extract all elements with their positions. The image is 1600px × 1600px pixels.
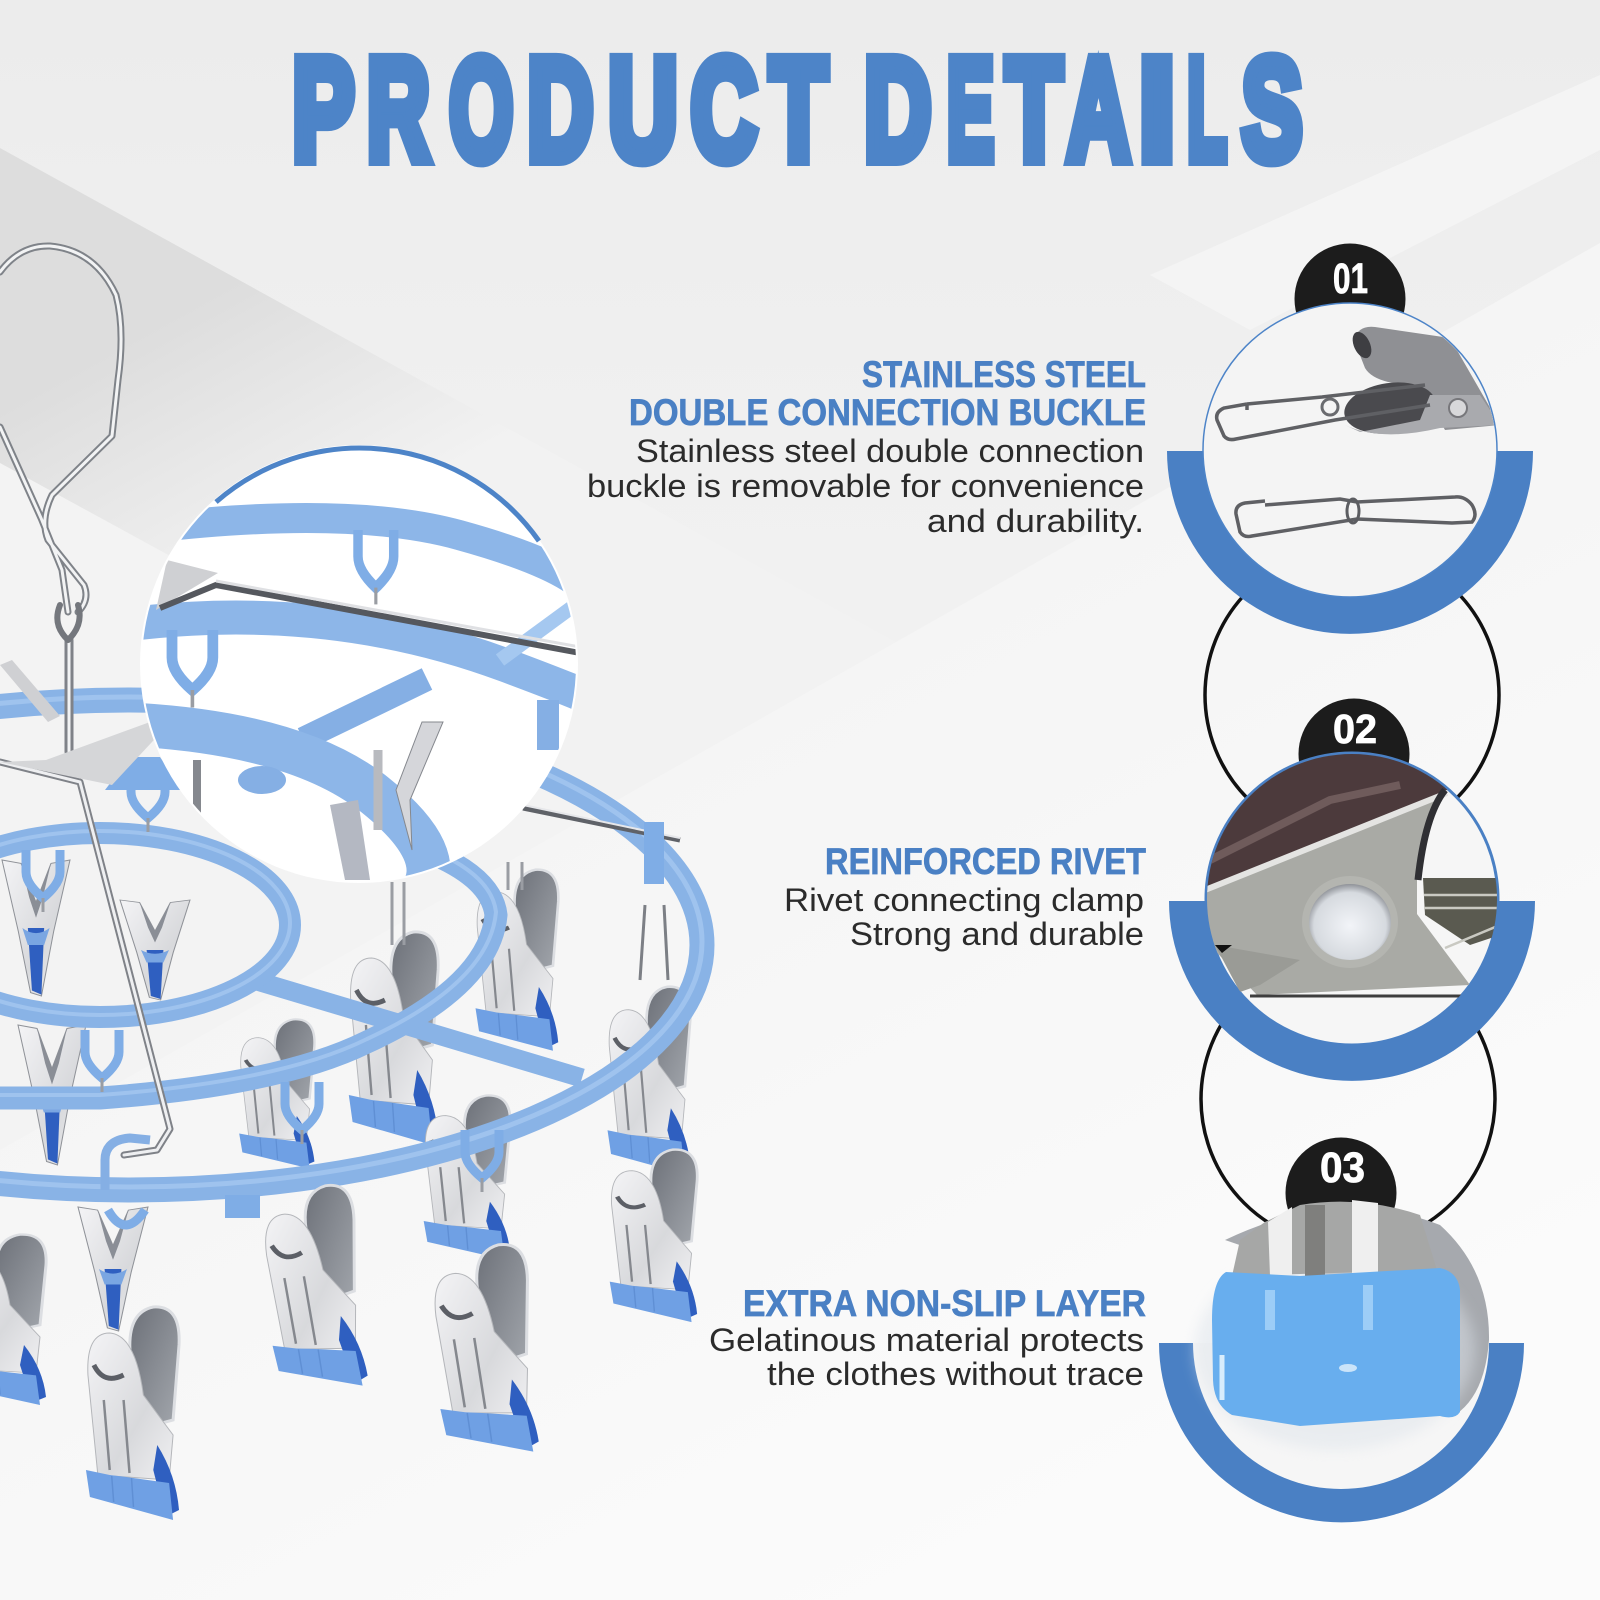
title: A [1067,29,1130,190]
photo: rivet close-up [1200,750,1500,1045]
badge 02 [1298,698,1410,810]
magnifier lens [140,445,578,883]
lens: blue tubes [143,503,576,876]
title: T [1006,29,1062,190]
title: R [367,29,430,190]
silver top plate [0,722,165,785]
heading 01: DOUBLE CONNECTION BUCKLE [629,392,1146,433]
detail 01: blue half ring and photo [1167,303,1533,634]
description 01: buckle is removable for convenience [587,468,1144,504]
photo: non-slip tip [1193,1200,1489,1489]
photo: clip and buckle [1203,303,1500,597]
description 01: Stainless steel double connection [636,433,1144,469]
ring spoke [257,981,582,1078]
right side steel bar and hanging hook [392,805,680,980]
title: O [449,29,513,190]
half ring [1169,901,1535,1081]
half ring [1159,1343,1524,1522]
lens: blue arc rim [216,448,539,541]
small blue tabs under rings [105,757,260,1225]
lens: clip blades [197,722,443,880]
lens: steel bar [156,560,580,653]
inner ring [0,831,290,1017]
badge 01 [1294,244,1406,354]
steel hook [0,246,121,640]
description 03: the clothes without trace [767,1356,1144,1392]
title: S [1242,29,1302,190]
description 03 [709,1322,1144,1392]
heading 01 [629,354,1146,433]
detail 02: blue half ring and photo [1169,750,1535,1081]
outer ring [0,697,702,1190]
lens: tube bump [238,766,286,794]
title: T [770,29,827,190]
blue hooks on rings [26,770,499,1192]
title: P [292,29,354,190]
title: D [864,29,931,190]
title: L [1187,29,1227,190]
connector circle outline 1 [1205,548,1499,842]
description 01: and durability. [927,503,1144,539]
description 01 [587,433,1144,539]
title: D [527,29,593,190]
middle ring [0,852,496,1098]
hanging rod and frame wire [0,640,170,1155]
title [292,29,1302,190]
detail 03: blue half ring and photo [1159,1200,1524,1522]
title: E [947,29,994,190]
description 02 [784,882,1144,952]
badge 02: 02 [1333,706,1377,752]
title: U [608,29,678,190]
description 02: Rivet connecting clamp [784,882,1144,918]
half ring [1167,451,1533,634]
front clips [0,1150,697,1520]
description 03: Gelatinous material protects [709,1322,1144,1358]
description 02: Strong and durable [850,916,1144,952]
title: I [1139,29,1175,190]
heading 02: REINFORCED RIVET [825,841,1146,882]
lens: blue hooks [172,530,548,750]
title: C [691,29,757,190]
badge 03 [1286,1138,1396,1248]
heading 01: STAINLESS STEEL [862,354,1146,395]
rear clips [2,860,690,1331]
badge 03: 03 [1320,1144,1365,1192]
badge 01: 01 [1333,255,1368,303]
heading 03: EXTRA NON-SLIP LAYER [743,1283,1146,1324]
connector circle outline 2 [1201,952,1495,1246]
product illustration: rotary clip hanger [0,246,702,1520]
